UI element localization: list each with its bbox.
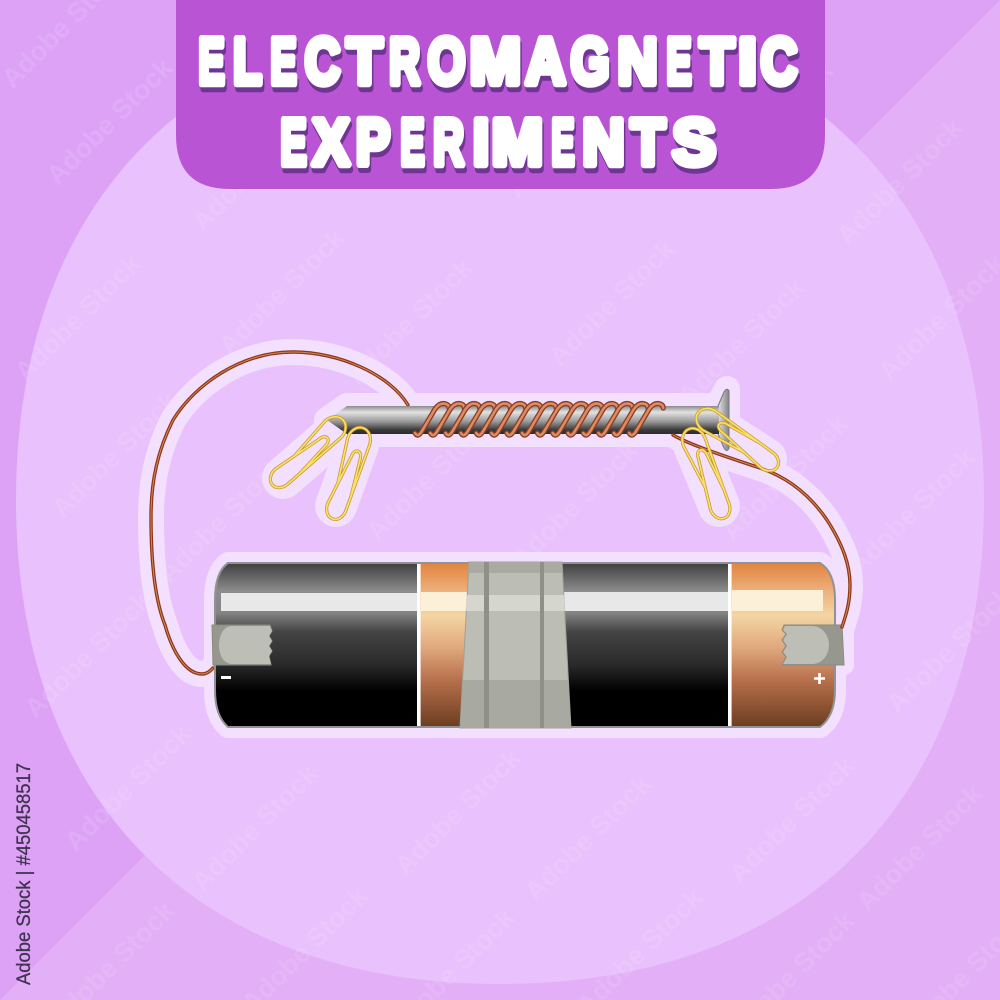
title: I: [474, 110, 490, 184]
title: E: [400, 106, 424, 178]
title: P: [356, 106, 390, 178]
stock watermarks: Adobe Stock: [673, 272, 811, 411]
title: I: [738, 24, 756, 98]
title: C: [762, 30, 799, 102]
stock watermarks: Adobe Stock: [153, 450, 291, 589]
title: E: [272, 30, 298, 102]
title: N: [584, 110, 626, 184]
battery: white separators: [417, 563, 732, 727]
nail shaft: [347, 406, 719, 434]
title: E: [270, 24, 297, 98]
stock watermarks: Adobe Stock: [19, 585, 157, 724]
wire: coil to positive terminal: [673, 435, 850, 627]
title: R: [433, 106, 464, 178]
title: M: [493, 110, 544, 184]
positive sign: [814, 673, 825, 684]
title: S: [674, 110, 717, 184]
vertical stock id: Adobe Stock | #450458517: [13, 763, 35, 985]
negative sign: [221, 676, 231, 679]
title: A: [527, 30, 567, 102]
sticker halo behind experiment: [151, 352, 850, 727]
stock watermarks: Adobe Stock: [186, 98, 324, 237]
battery: [215, 563, 835, 727]
title: E: [668, 30, 693, 102]
title: P: [358, 110, 392, 184]
title: T: [702, 30, 736, 102]
paperclip: lower left inner: [322, 424, 374, 523]
title: E: [553, 110, 576, 184]
grey tape wrap: [460, 562, 571, 728]
wire: negative terminal to coil: [151, 352, 408, 674]
title: T: [632, 110, 666, 184]
stock watermarks: Adobe Stock: [716, 408, 854, 547]
paperclip: lower left outer: [265, 412, 351, 494]
title: C: [761, 24, 797, 98]
stock watermarks: Adobe Stock: [46, 385, 184, 524]
stock watermarks: Adobe Stock: [851, 778, 989, 917]
title banner: [176, 0, 825, 189]
title: N: [619, 30, 659, 102]
title: R: [435, 110, 465, 184]
title: M: [492, 106, 543, 178]
title: E: [200, 30, 226, 102]
title: R: [389, 24, 420, 98]
title: C: [305, 24, 340, 98]
stock watermarks: Adobe Stock: [676, 595, 814, 734]
paperclip: lower right outer: [692, 403, 784, 476]
title: N: [618, 24, 657, 98]
stock watermarks: Adobe Stock: [389, 742, 527, 881]
stock watermarks: Adobe Stock: [723, 750, 861, 889]
title: O: [428, 24, 465, 98]
stock watermarks: Adobe Stock: [371, 55, 509, 194]
title: G: [572, 30, 611, 102]
battery: right copper cell: [730, 563, 835, 727]
title: C: [306, 30, 342, 102]
title: L: [235, 30, 263, 102]
battery outline: [215, 563, 835, 727]
stock watermarks: Adobe Stock: [361, 408, 499, 547]
stock watermarks: Adobe Stock: [506, 435, 644, 574]
title: E: [552, 106, 574, 178]
title: X: [314, 110, 351, 184]
title: T: [631, 106, 665, 178]
stock watermarks: Adobe Stock: [186, 758, 324, 897]
stock watermarks: Adobe Stock: [343, 590, 481, 729]
title: E: [666, 24, 692, 98]
paperclip: lower right inner: [678, 425, 736, 522]
stock watermarks: Adobe Stock: [41, 52, 179, 191]
title: I: [473, 106, 489, 178]
stock watermarks: Adobe Stock: [9, 248, 147, 387]
battery: highlights: [221, 590, 823, 611]
title: R: [391, 30, 421, 102]
stock watermarks: Adobe Stock: [59, 718, 197, 857]
title: T: [347, 24, 382, 98]
title: L: [233, 24, 262, 98]
left terminal tape: [212, 625, 272, 665]
title: O: [429, 30, 467, 102]
title: A: [526, 24, 565, 98]
stock watermarks: Adobe Stock: [501, 65, 639, 204]
nail tip: [327, 406, 347, 434]
title: M: [471, 30, 522, 102]
title: E: [402, 110, 426, 184]
title: T: [700, 24, 734, 98]
stock watermarks: Adobe Stock: [219, 552, 357, 691]
title: X: [313, 106, 349, 178]
title: M: [470, 24, 521, 98]
stock watermarks: Adobe Stock: [701, 55, 839, 194]
title: N: [582, 106, 624, 178]
battery: right black cell: [555, 563, 730, 727]
title: T: [348, 30, 384, 102]
title: S: [672, 106, 716, 178]
stock watermarks: Adobe Stock: [341, 252, 479, 391]
stock watermarks: Adobe Stock: [831, 112, 969, 251]
right terminal tape: [782, 625, 844, 665]
title: [198, 24, 799, 184]
stock watermarks: Adobe Stock: [843, 442, 981, 581]
nail: [327, 389, 729, 450]
title: I: [740, 30, 758, 102]
stock watermarks: Adobe Stock: [213, 222, 351, 361]
title: E: [282, 110, 308, 184]
title: E: [198, 24, 225, 98]
stock watermarks: Adobe Stock: [543, 233, 681, 372]
title: G: [571, 24, 609, 98]
copper coil: [415, 404, 663, 435]
battery: left copper cell: [420, 564, 468, 726]
battery: left black cell: [215, 563, 419, 727]
nail head: [718, 389, 729, 450]
title: E: [280, 106, 307, 178]
stock watermarks: Adobe Stock: [519, 768, 657, 907]
